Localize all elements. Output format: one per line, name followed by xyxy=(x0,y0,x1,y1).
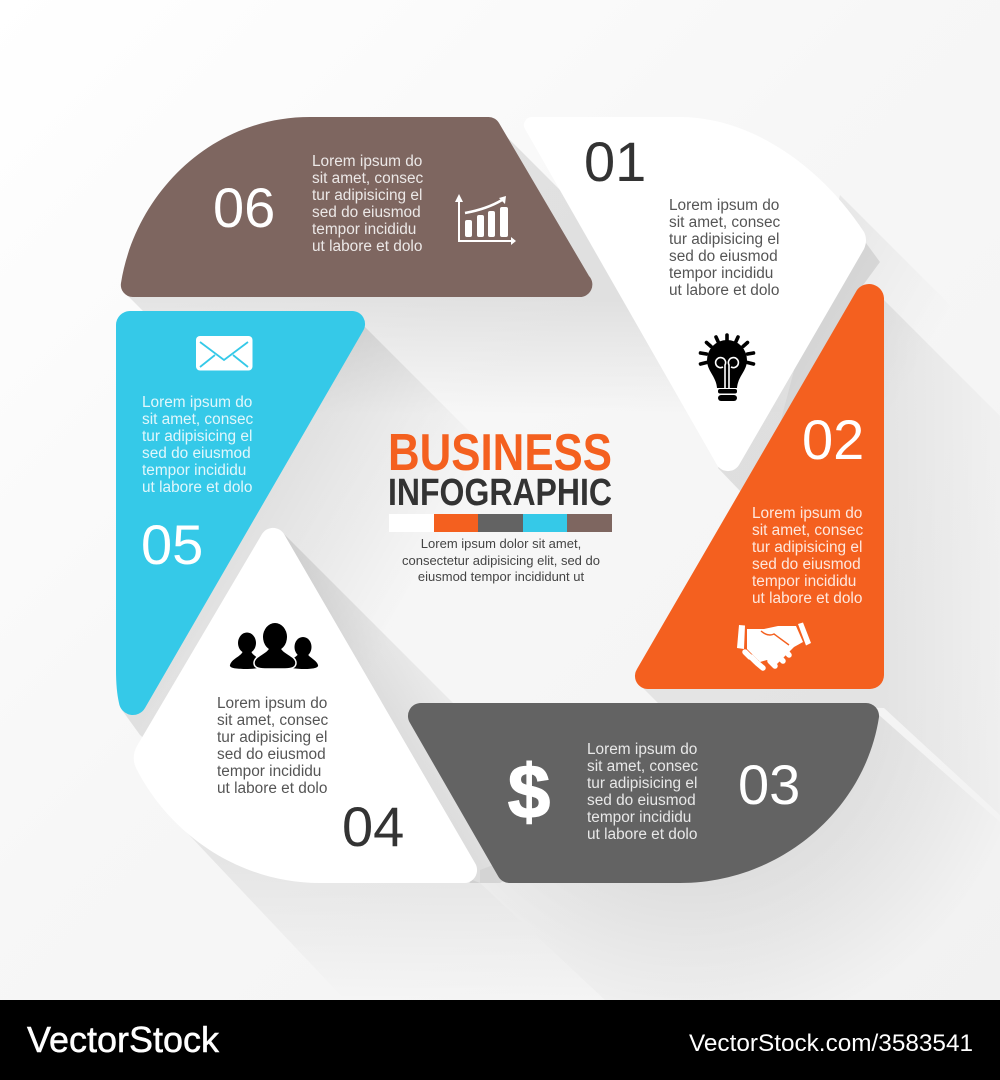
text block 03: tur adipisicing el xyxy=(587,775,697,792)
heading: INFOGRAPHIC: INFOGRAPHIC xyxy=(388,472,612,514)
number 01: 01 xyxy=(584,130,646,193)
text block 04: sit amet, consec xyxy=(217,712,329,729)
text block 05: sed do eiusmod xyxy=(142,445,251,462)
number 04: 04 xyxy=(342,795,404,858)
text block 02: Lorem ipsum do xyxy=(752,505,862,522)
text block 01: tempor incididu xyxy=(669,265,773,282)
text block 06 xyxy=(312,153,424,255)
text block 06: Lorem ipsum do xyxy=(312,153,422,170)
text block 01 xyxy=(669,197,781,299)
panel 05: blue segment xyxy=(116,311,365,715)
text block 01: sit amet, consec xyxy=(669,214,781,231)
text block 03: tempor incididu xyxy=(587,809,691,826)
footer url: VectorStock.com/3583541 xyxy=(689,1030,973,1057)
icon: growth chart xyxy=(455,194,516,245)
center description: consectetur adipisicing elit, sed do xyxy=(402,553,600,568)
text block 05 xyxy=(142,394,254,496)
colour legend bar xyxy=(389,514,612,532)
panel 06: brown segment xyxy=(121,117,592,297)
heading: BUSINESS: BUSINESS xyxy=(388,424,612,482)
number 02: 02 xyxy=(802,408,864,471)
text block 02 xyxy=(752,505,864,607)
text block 05: Lorem ipsum do xyxy=(142,394,252,411)
panel 01: white segment xyxy=(524,117,866,471)
panel 04: white segment xyxy=(134,528,477,883)
number 06: 06 xyxy=(213,176,275,239)
panel 03: grey segment xyxy=(408,703,879,883)
icon: light bulb xyxy=(700,335,754,401)
text block 06: tempor incididu xyxy=(312,221,416,238)
long shadows xyxy=(122,120,1000,1008)
text block 03: sed do eiusmod xyxy=(587,792,696,809)
text block 01: Lorem ipsum do xyxy=(669,197,779,214)
center description: Lorem ipsum dolor sit amet, xyxy=(421,536,581,551)
number 05: 05 xyxy=(141,513,203,576)
text block 04: ut labore et dolo xyxy=(217,780,327,797)
text block 05: ut labore et dolo xyxy=(142,479,252,496)
text block 04 xyxy=(217,695,329,797)
text block 04: sed do eiusmod xyxy=(217,746,326,763)
text block 04: tur adipisicing el xyxy=(217,729,327,746)
text block 01: tur adipisicing el xyxy=(669,231,779,248)
text block 05: tempor incididu xyxy=(142,462,246,479)
text block 01: ut labore et dolo xyxy=(669,282,779,299)
center description xyxy=(402,536,600,584)
icon: handshake xyxy=(737,622,811,668)
text block 06: sit amet, consec xyxy=(312,170,424,187)
footer bar xyxy=(0,1000,1000,1080)
center title xyxy=(388,424,612,584)
text block 04: Lorem ipsum do xyxy=(217,695,327,712)
text block 06: tur adipisicing el xyxy=(312,187,422,204)
text block 02: tempor incididu xyxy=(752,573,856,590)
text block 02: sed do eiusmod xyxy=(752,556,861,573)
icon: dollar: $ xyxy=(508,750,550,835)
number 03: 03 xyxy=(738,753,800,816)
text block 06: ut labore et dolo xyxy=(312,238,422,255)
text block 04: tempor incididu xyxy=(217,763,321,780)
text block 02: sit amet, consec xyxy=(752,522,864,539)
text block 06: sed do eiusmod xyxy=(312,204,421,221)
icon: envelope xyxy=(196,336,252,370)
panel 02: orange segment xyxy=(635,284,884,689)
center description: eiusmod tempor incididunt ut xyxy=(418,569,584,584)
text block 01: sed do eiusmod xyxy=(669,248,778,265)
text block 02: ut labore et dolo xyxy=(752,590,862,607)
text block 03: sit amet, consec xyxy=(587,758,699,775)
text block 03 xyxy=(587,741,699,843)
text block 03: Lorem ipsum do xyxy=(587,741,697,758)
text block 03: ut labore et dolo xyxy=(587,826,697,843)
text block 05: tur adipisicing el xyxy=(142,428,252,445)
footer logo: VectorStock xyxy=(27,1019,220,1060)
text block 02: tur adipisicing el xyxy=(752,539,862,556)
icon: people xyxy=(230,623,318,669)
text block 05: sit amet, consec xyxy=(142,411,254,428)
